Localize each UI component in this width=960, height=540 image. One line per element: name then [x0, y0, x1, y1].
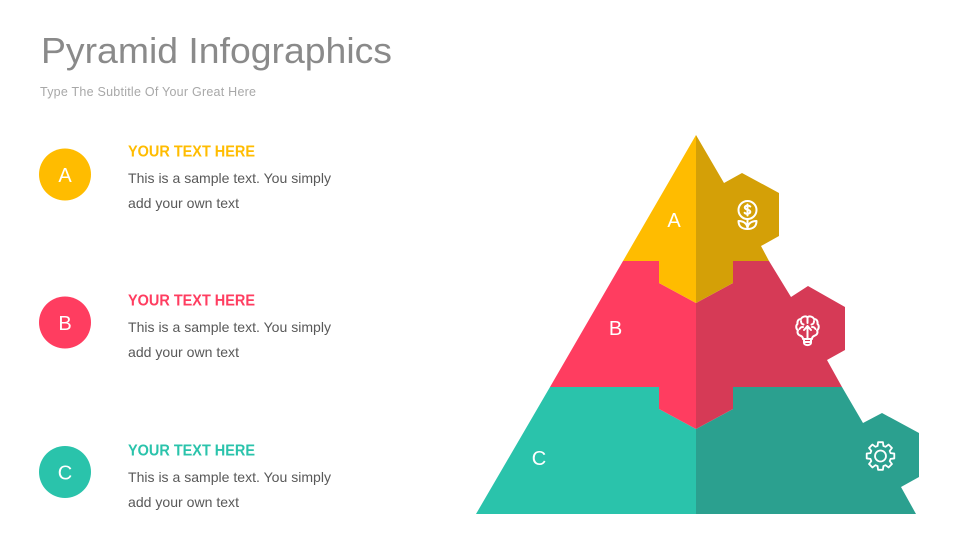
list item C [39, 442, 331, 510]
icon: brain bulb [796, 316, 819, 345]
body text C [128, 469, 331, 510]
badge C: C [58, 462, 72, 484]
body text A [128, 170, 331, 211]
body text B: This is a sample text. You simply [128, 319, 331, 335]
icon: money flower [738, 201, 756, 229]
body text B [128, 319, 331, 360]
body text A: add your own text [128, 195, 239, 211]
subtitle: Type The Subtitle Of Your Great Here [40, 85, 256, 99]
list item B [39, 292, 331, 360]
heading C: YOUR TEXT HERE [128, 442, 255, 460]
list item A [39, 144, 331, 211]
badge B: B [58, 313, 72, 335]
tier B [550, 261, 845, 429]
body text B: add your own text [128, 344, 239, 360]
tier A [623, 135, 779, 303]
badge C [39, 446, 91, 498]
heading A: YOUR TEXT HERE [128, 144, 255, 160]
tier B: B [609, 318, 622, 340]
tier C [476, 387, 919, 514]
tier C: C [532, 448, 546, 470]
badge A [39, 148, 91, 200]
heading B: YOUR TEXT HERE [128, 292, 255, 310]
pyramid [476, 135, 919, 514]
badge B [39, 296, 91, 348]
body text A: This is a sample text. You simply [128, 170, 331, 186]
title: Pyramid Infographics [41, 30, 392, 71]
badge A: A [58, 165, 72, 187]
body text C: add your own text [128, 494, 239, 510]
body text C: This is a sample text. You simply [128, 469, 331, 485]
tier A: A [667, 210, 681, 232]
icon: gear [867, 442, 894, 470]
